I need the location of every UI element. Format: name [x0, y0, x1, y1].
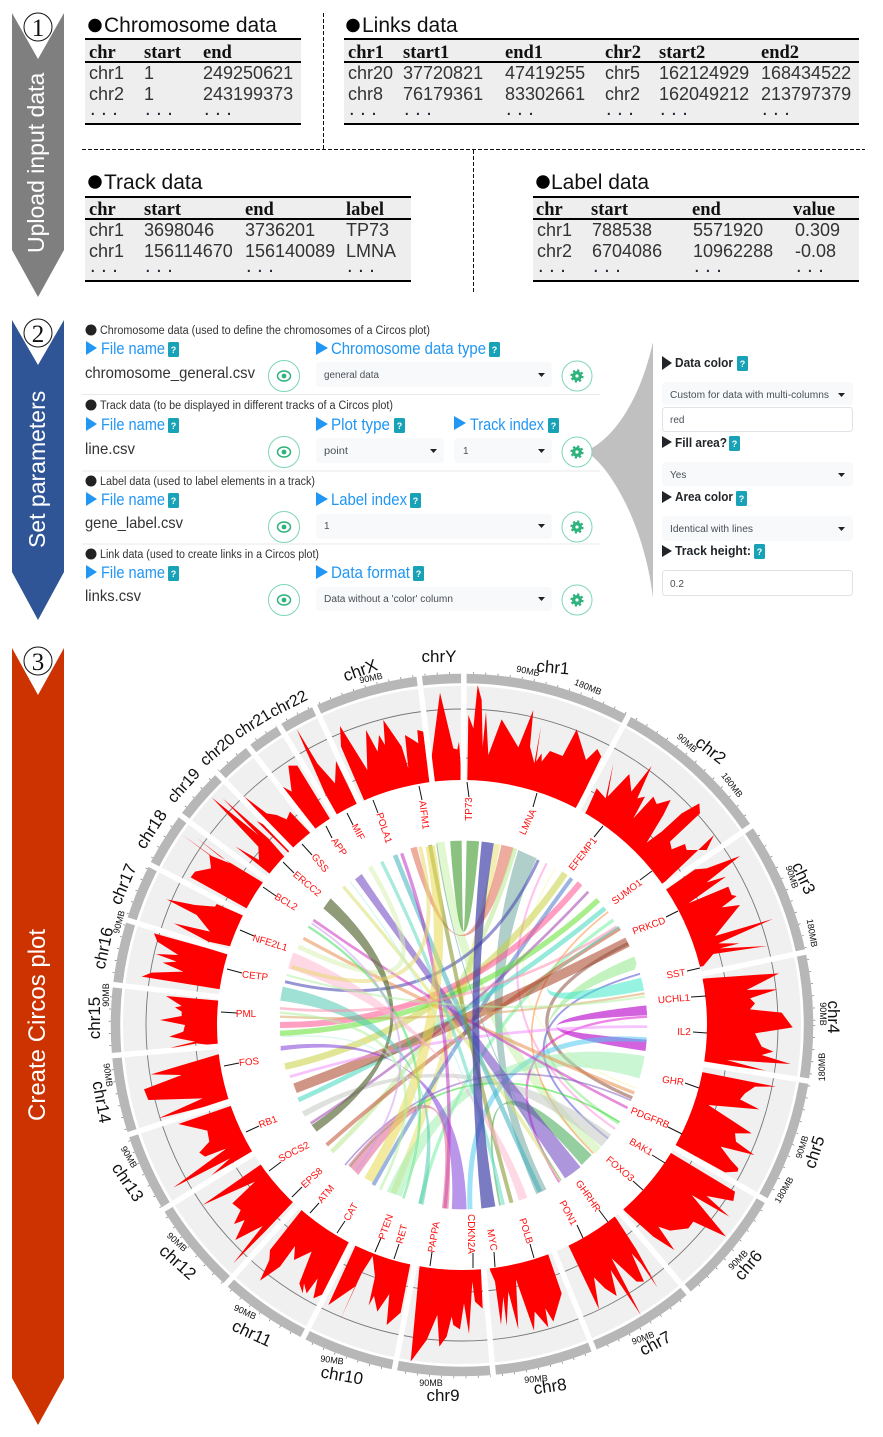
table: track data: chr1	[89, 241, 124, 261]
panel: link parameters: Data format	[331, 563, 410, 582]
table: track data: . . .	[347, 255, 375, 277]
track: chr20	[244, 797, 462, 1025]
gene labels: LMNA	[518, 807, 539, 837]
track: chr13	[173, 1025, 462, 1188]
panel: track options: Fill area?	[675, 435, 727, 450]
arrow: set parameters: Set parameters	[24, 391, 50, 548]
chromosome labels: chr12	[156, 1241, 200, 1284]
panel: track options: Identical with lines	[670, 524, 753, 535]
table: links data: start2	[659, 43, 705, 63]
gene labels: EFEMP1	[567, 835, 600, 873]
axis tick labels: 90MB	[794, 1134, 810, 1160]
axis tick labels: 90MB	[165, 1230, 189, 1254]
track: chr2	[462, 763, 714, 1025]
track: chr14	[144, 1025, 462, 1118]
axis tick labels	[101, 664, 828, 1388]
gene labels: UCHL1	[658, 993, 691, 1006]
axis tick labels: 90MB	[101, 983, 111, 1007]
gene labels: GHR	[661, 1075, 684, 1088]
axis ticks	[110, 673, 814, 1377]
chromosome labels: chr18	[132, 806, 171, 852]
axis tick labels: 180MB	[573, 677, 603, 697]
arrow: upload input data: 1	[32, 15, 44, 42]
table: track data	[85, 171, 411, 281]
track: chr16	[142, 933, 462, 1025]
arrow: set parameters: 2	[32, 321, 44, 348]
panel: track options: ?	[739, 494, 744, 504]
table: links data: . . .	[660, 98, 688, 120]
track: chr17	[167, 899, 462, 1025]
gene labels: PAPPA	[426, 1220, 443, 1253]
arrow: upload input data: Upload input data	[23, 72, 49, 253]
chromosome labels: chrY	[422, 647, 456, 666]
track: chrX	[340, 720, 462, 1025]
arrow: create circos plot: Create Circos plot	[24, 929, 51, 1121]
panel: track options: Track height:	[675, 543, 751, 558]
panel: label parameters: ?	[171, 496, 176, 506]
table: label data: 788538	[592, 220, 652, 240]
panel: chromosome parameters: Chromosome data (used to define the chromosomes of a Circos plot)	[100, 325, 430, 337]
table: label data: 0.309	[795, 220, 840, 240]
table: track data: 3736201	[245, 220, 315, 240]
gene labels: BCL2	[272, 892, 299, 913]
track: chrY	[432, 693, 462, 1025]
panel: track parameters: ?	[397, 421, 402, 431]
table: chromosome data: Chromosome data	[104, 14, 277, 37]
table: links data: 168434522	[761, 63, 851, 83]
panel: label parameters	[85, 476, 592, 542]
gene labels: RB1	[257, 1114, 279, 1131]
gene labels: MYC	[484, 1228, 499, 1252]
table: links data: chr20	[348, 63, 393, 83]
table: track data: . . .	[90, 255, 118, 277]
track: chr5	[462, 1025, 776, 1172]
table: track data: TP73	[346, 220, 389, 240]
table: track data: . . .	[246, 255, 274, 277]
table: links data: . . .	[404, 98, 432, 120]
panel: link parameters: ?	[171, 569, 176, 579]
table: links data: 37720821	[403, 63, 483, 83]
gene labels: SOCS2	[277, 1140, 312, 1165]
gene label connectors	[221, 782, 707, 1268]
axis tick labels: 90MB	[320, 1353, 344, 1367]
track: chr6	[462, 1025, 735, 1250]
table: links data: Links data	[362, 14, 458, 37]
panel: track parameters: Track index	[470, 415, 544, 434]
table: track data: Track data	[104, 171, 203, 194]
gene labels: GSS	[309, 852, 331, 875]
table: label data	[533, 171, 859, 281]
chromosome labels: chr2	[692, 733, 730, 768]
table: links data: . . .	[506, 98, 534, 120]
panel: track parameters: line.csv	[85, 441, 135, 458]
panel: track options: ?	[740, 359, 745, 369]
panel: link parameters: Link data (used to create links in a Circos plot)	[100, 549, 319, 561]
panel: track parameters: ?	[171, 421, 176, 431]
chromosome labels: chr10	[319, 1362, 365, 1389]
track: chr15	[160, 996, 462, 1050]
gene labels: ERCC2	[290, 869, 323, 899]
panel: track options: Area color	[675, 489, 733, 504]
table: links data: 162049212	[659, 84, 749, 104]
gene labels: PML	[236, 1009, 257, 1020]
panel: track parameters: Plot type	[331, 415, 390, 434]
track: chr19	[212, 797, 462, 1025]
panel: track parameters: ?	[551, 421, 556, 431]
gene labels: MIF	[349, 822, 366, 842]
track: chr3	[462, 856, 773, 1025]
table: track data: LMNA	[346, 241, 396, 261]
panel: track options: Custom for data with multi-columns	[670, 390, 829, 401]
table: track data: chr1	[89, 220, 124, 240]
arrow: set parameters	[12, 319, 64, 620]
table: links data: end2	[761, 43, 799, 63]
gene labels: TP73	[464, 797, 475, 821]
table: chromosome data: 249250621	[203, 63, 293, 83]
table: chromosome data: 1	[144, 63, 154, 83]
axis tick labels: 90MB	[358, 671, 384, 685]
track: chr4	[462, 973, 793, 1071]
table: links data: 162124929	[659, 63, 749, 83]
gene labels: EPS8	[299, 1166, 326, 1191]
red area track	[142, 685, 793, 1362]
table: track data: label	[346, 200, 384, 220]
table: label data: chr1	[537, 220, 572, 240]
chromosome labels: chr1	[536, 657, 570, 678]
gene labels: PTEN	[377, 1213, 396, 1241]
table: chromosome data: chr1	[89, 63, 124, 83]
arrow: create circos plot	[12, 647, 64, 1425]
axis tick labels: 90MB	[630, 1329, 656, 1347]
table: links data: 213797379	[761, 84, 851, 104]
panel: track parameters: File name	[101, 415, 165, 434]
table: chromosome data: end	[203, 43, 232, 63]
chromosome labels: chr4	[824, 1000, 843, 1034]
table: label data: 6704086	[592, 241, 662, 261]
chromosome labels: chr20	[197, 731, 239, 770]
table: links data	[344, 14, 859, 124]
panel: track options	[662, 355, 853, 596]
panel: chromosome parameters: chromosome_general.csv	[85, 365, 255, 382]
axis tick labels: 90MB	[119, 1144, 139, 1170]
table: chromosome data	[85, 14, 301, 124]
panel: track options: Yes	[670, 470, 686, 481]
axis tick labels: 180MB	[773, 1175, 795, 1205]
table: label data: start	[591, 200, 629, 220]
table: label data: 10962288	[693, 241, 773, 261]
gene labels: PON1	[556, 1199, 579, 1228]
track: chr21	[283, 766, 462, 1025]
panel: chromosome parameters: ?	[492, 345, 497, 355]
axis tick labels: 90MB	[675, 731, 699, 755]
gene labels: RET	[395, 1223, 410, 1245]
axis tick labels: 90MB	[524, 1373, 548, 1385]
panel: track options: 0.2	[670, 579, 684, 590]
track: chr8	[462, 1025, 562, 1331]
table: chromosome data: chr2	[89, 84, 124, 104]
table: track data: 3698046	[144, 220, 214, 240]
chromosome labels: chrX	[340, 656, 380, 685]
gene labels: AIFM1	[416, 800, 431, 830]
table: track data: end	[245, 200, 274, 220]
axis tick labels: 180MB	[817, 1053, 827, 1081]
gene labels: GHRHR	[573, 1178, 602, 1214]
table: links data: 83302661	[505, 84, 585, 104]
table: links data: chr2	[605, 43, 641, 63]
table: chromosome data: . . .	[145, 98, 173, 120]
panel: track options: ?	[757, 547, 762, 557]
panel: label parameters: Label index	[331, 490, 407, 509]
gene labels: SST	[666, 967, 686, 982]
table: label data: chr2	[537, 241, 572, 261]
panel: track parameters: point	[324, 446, 348, 457]
table: chromosome data: . . .	[204, 98, 232, 120]
gene labels: CAT	[342, 1201, 361, 1223]
chromosome labels: chr16	[90, 925, 117, 971]
table: label data: . . .	[694, 255, 722, 277]
table: label data: value	[793, 200, 835, 220]
panel: link parameters	[85, 548, 592, 616]
axis tick labels: 90MB	[111, 909, 127, 935]
panel: link parameters: Data without a 'color' column	[324, 594, 453, 605]
table: chromosome data: 243199373	[203, 84, 293, 104]
panel: link parameters: ?	[416, 569, 421, 579]
gene labels: NFE2L1	[251, 933, 289, 954]
panel: track parameters: Track data (to be displayed in different tracks of a Circos plot)	[100, 400, 393, 412]
axis tick labels: 90MB	[515, 664, 541, 678]
table: track data: chr	[89, 200, 116, 220]
table: links data: . . .	[349, 98, 377, 120]
panel: chromosome parameters: ?	[171, 345, 176, 355]
gene labels: ATM	[316, 1183, 337, 1205]
panel: label parameters: ?	[413, 496, 418, 506]
table: label data: Label data	[551, 171, 649, 194]
track: chr9	[411, 1025, 483, 1362]
table: track data: 156140089	[245, 241, 335, 261]
chromosome labels: chr14	[88, 1079, 115, 1125]
track background	[170, 733, 754, 1317]
panel: chromosome parameters: File name	[101, 339, 165, 358]
table: links data: chr1	[348, 43, 384, 63]
panel: chromosome parameters: Chromosome data type	[331, 339, 486, 358]
gene labels: CDKN2A	[465, 1214, 476, 1254]
gene labels	[236, 797, 691, 1254]
panel: track options: red	[670, 415, 684, 426]
gene labels: PDGFRB	[629, 1106, 671, 1131]
table: links data: 47419255	[505, 63, 585, 83]
axis tick labels: 90MB	[232, 1302, 258, 1322]
gene labels: APP	[328, 836, 349, 859]
chromosome labels: chr17	[106, 861, 141, 907]
panel: label parameters: File name	[101, 490, 165, 509]
chromosome labels: chr11	[229, 1316, 275, 1351]
table: links data: . . .	[762, 98, 790, 120]
gene labels: FOXO3	[603, 1154, 636, 1185]
table: links data: chr5	[605, 63, 640, 83]
table: label data: 5571920	[693, 220, 763, 240]
dashed dividers	[82, 13, 865, 293]
chromosome labels: chr6	[730, 1247, 766, 1284]
axis tick labels: 90MB	[419, 1378, 443, 1388]
table: chromosome data: . . .	[90, 98, 118, 120]
gene labels: IL2	[677, 1027, 691, 1038]
gene labels: SUMO1	[610, 878, 645, 907]
gene labels: PRKCD	[631, 915, 667, 938]
table: label data: . . .	[796, 255, 824, 277]
chromosome labels	[85, 647, 843, 1405]
table: chromosome data: 1	[144, 84, 154, 104]
panel: track options: ?	[732, 439, 737, 449]
table: links data: start1	[403, 43, 449, 63]
table: links data: 76179361	[403, 84, 483, 104]
table: label data: end	[692, 200, 722, 220]
table: label data: chr	[536, 200, 563, 220]
chromosome labels: chr21	[231, 706, 274, 742]
track: chr12	[203, 1025, 462, 1263]
track: chr22	[297, 729, 462, 1025]
table: links data: end1	[505, 43, 543, 63]
table: label data: -0.08	[795, 241, 836, 261]
chromosome labels: chr3	[788, 859, 819, 897]
table: track data: 156114670	[144, 241, 233, 261]
panel: chromosome parameters: general data	[324, 370, 379, 381]
chromosome labels: chr7	[636, 1327, 674, 1360]
panel: label parameters: gene_label.csv	[85, 515, 183, 532]
panel: track parameters: 1	[463, 446, 469, 457]
panel: link parameters: links.csv	[85, 588, 141, 605]
chromosome labels: chr5	[800, 1133, 829, 1171]
track: chr7	[462, 1025, 657, 1315]
panel: label parameters: Label data (used to label elements in a track)	[100, 476, 315, 488]
chromosome ideogram ring	[116, 678, 808, 1372]
track: chr11	[260, 1025, 462, 1298]
chromosome labels: chr22	[267, 688, 310, 721]
table: links data: . . .	[606, 98, 634, 120]
table: track data: . . .	[145, 255, 173, 277]
table: label data: . . .	[593, 255, 621, 277]
panel: label parameters: 1	[324, 521, 330, 532]
grey flare connecting gear to options panel	[592, 342, 653, 598]
axis tick labels: 90MB	[101, 1063, 115, 1087]
table: track data: start	[144, 200, 182, 220]
table: label data: . . .	[538, 255, 566, 277]
sector gaps	[106, 668, 814, 1381]
table: chromosome data: start	[144, 43, 182, 63]
panel: track parameters	[85, 400, 592, 468]
chromosome labels: chr8	[532, 1375, 568, 1398]
chromosome labels: chr19	[164, 765, 204, 807]
axis tick labels: 180MB	[805, 918, 819, 948]
axis tick labels: 90MB	[726, 1248, 750, 1272]
panel: chromosome parameters	[85, 324, 592, 392]
track: chr1	[462, 685, 601, 1025]
gene labels: POLA1	[373, 811, 394, 845]
gene labels: POLB	[516, 1217, 535, 1246]
gene labels: BAK1	[627, 1136, 654, 1158]
track: chr18	[182, 834, 462, 1025]
circos plot	[85, 647, 843, 1405]
table: links data: chr8	[348, 84, 383, 104]
chromosome labels: chr9	[426, 1386, 460, 1405]
gene labels: FOS	[239, 1056, 260, 1069]
chromosome labels: chr13	[108, 1159, 147, 1205]
axis tick labels: 180MB	[719, 771, 745, 799]
track: chr10	[328, 1025, 462, 1325]
arrow: upload input data	[12, 13, 64, 297]
panel: track options: Data color	[675, 355, 733, 370]
links between chromosomes	[280, 838, 650, 1212]
arrow: create circos plot: 3	[32, 649, 44, 676]
gene labels: CETP	[241, 969, 269, 984]
axis tick labels: 90MB	[818, 1002, 828, 1026]
table: links data: chr2	[605, 84, 640, 104]
panel: link parameters: File name	[101, 563, 165, 582]
chromosome labels: chr15	[85, 997, 104, 1039]
table: chromosome data: chr	[89, 43, 116, 63]
axis tick labels: 90MB	[784, 864, 800, 890]
